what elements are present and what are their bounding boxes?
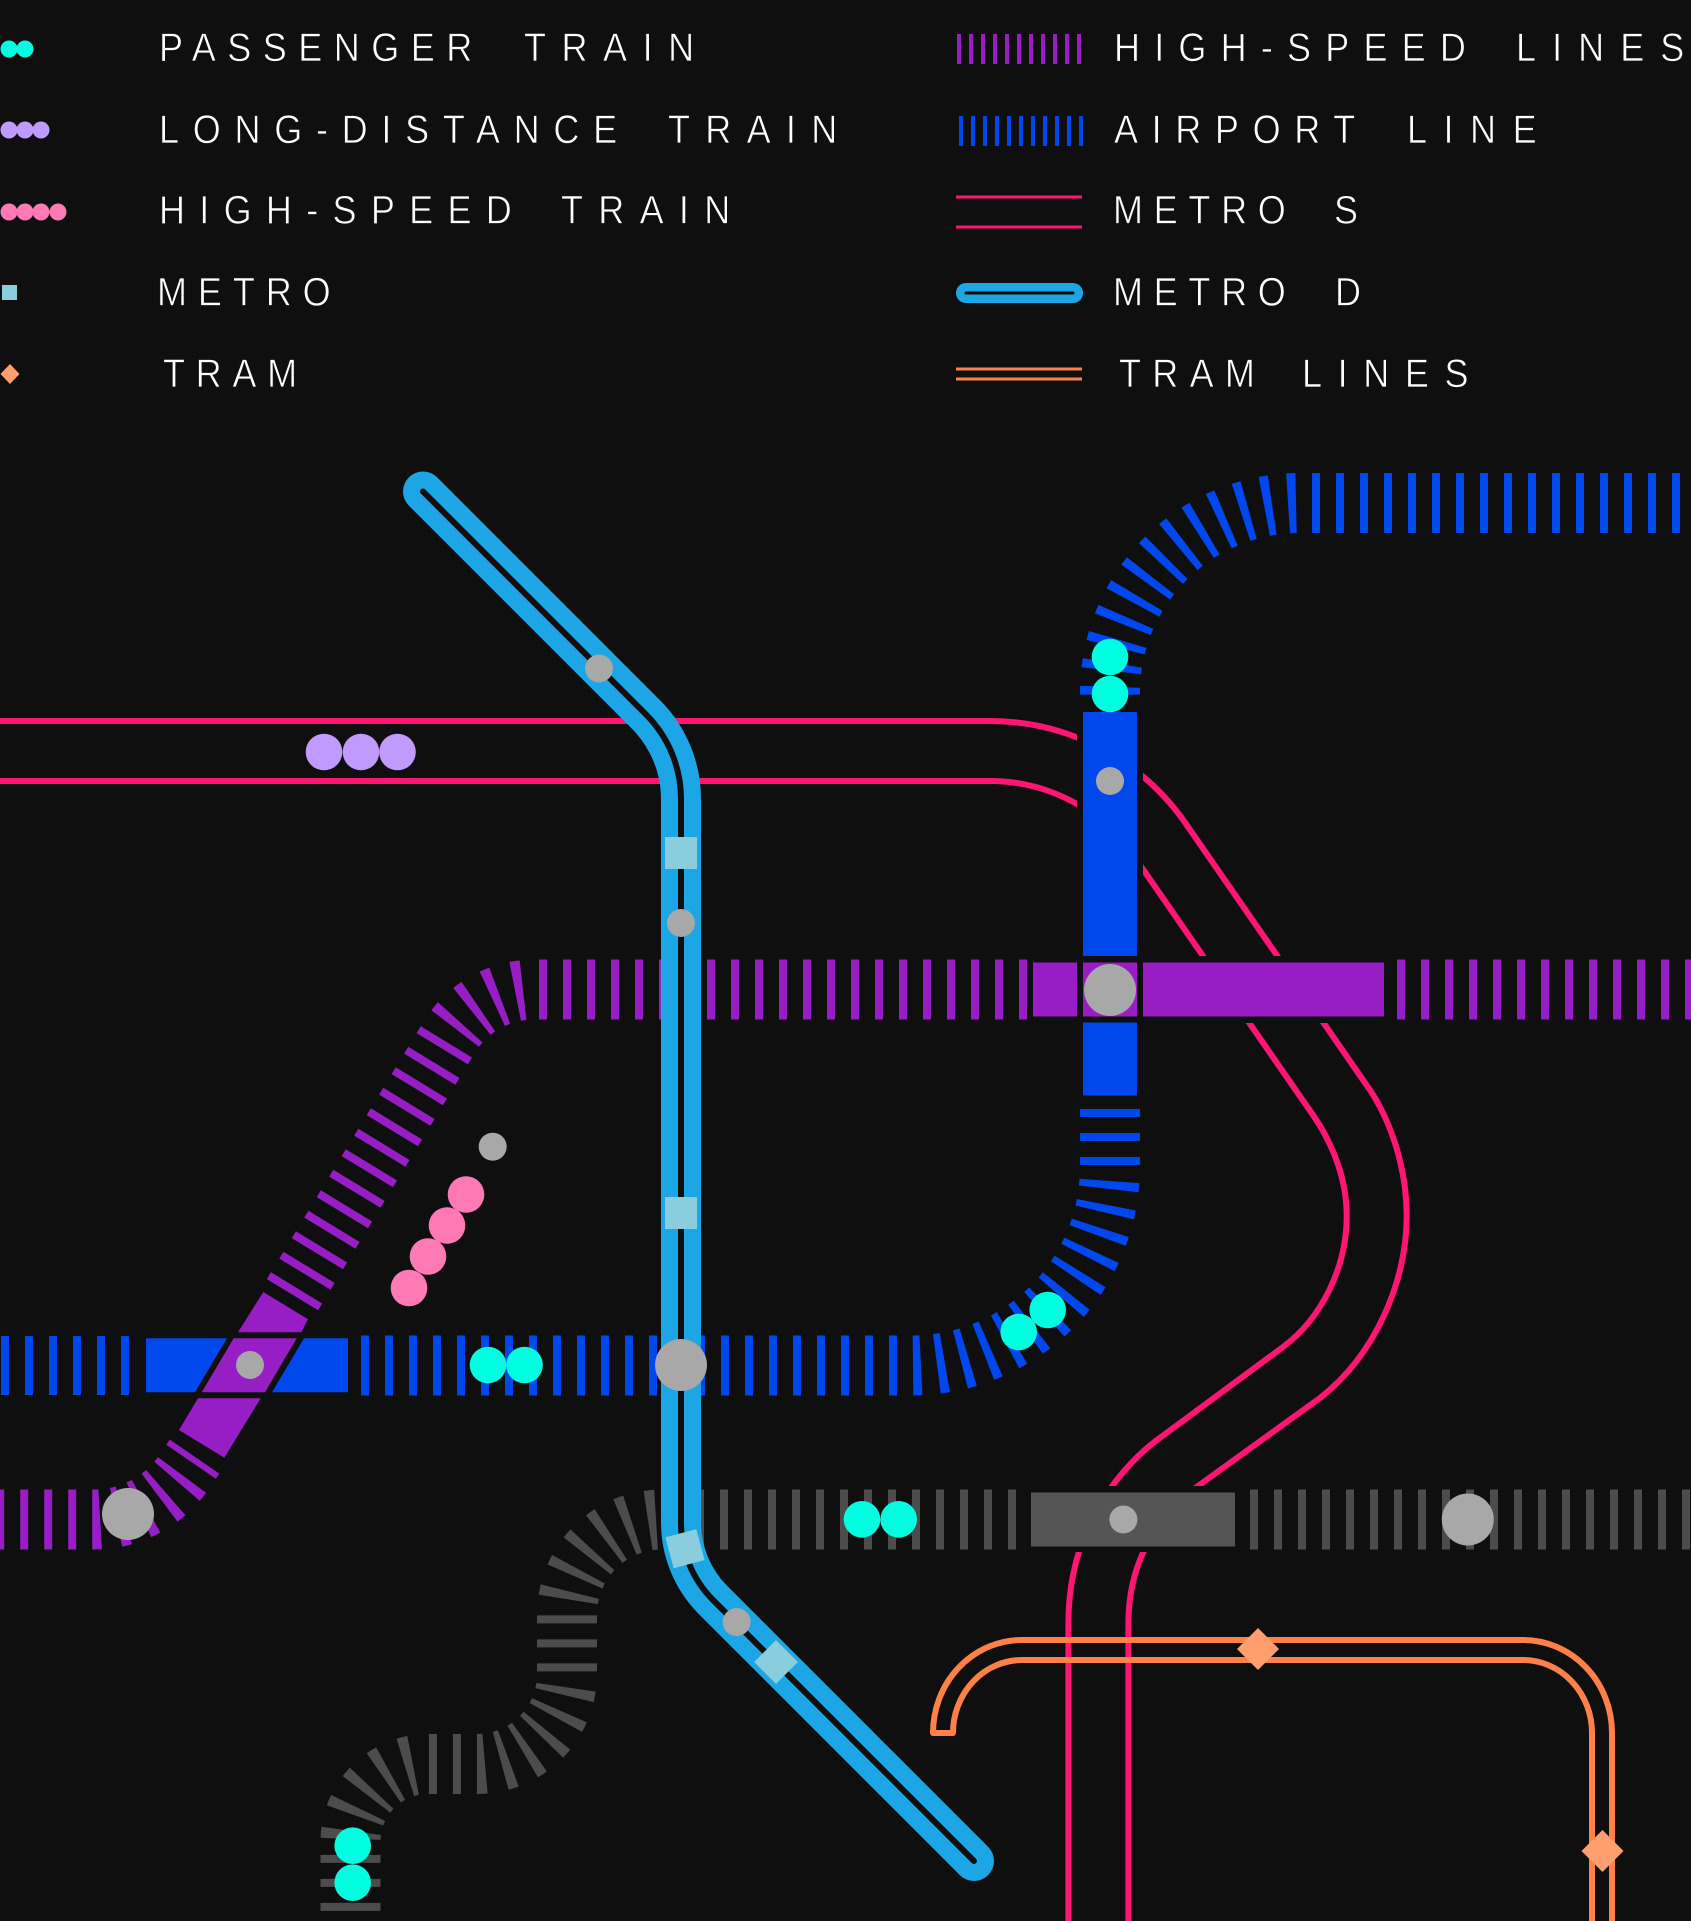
legend: high-speed lines: LINES (1516, 26, 1684, 70)
legend: metro: METRO (157, 271, 331, 315)
tram lines (933, 1640, 1612, 1921)
high-speed line: lower left (0, 1457, 195, 1520)
passenger trains (334, 639, 1128, 1901)
legend: tram: TRAM (163, 352, 297, 396)
legend: metro s: S (1334, 189, 1358, 233)
legend: long-distance train: LONG-DISTANCE (159, 108, 617, 152)
high-speed train (391, 1176, 484, 1306)
legend (0, 26, 1684, 396)
airport line: horizontal right and curve (361, 1105, 1110, 1366)
legend: tram lines (956, 352, 1468, 396)
legend: passenger train (0, 26, 694, 70)
metro D line (423, 492, 974, 1861)
legend: metro d: METRO (1113, 271, 1286, 315)
legend: metro s: METRO (1113, 189, 1286, 233)
legend: high-speed train (0, 189, 730, 233)
legend: metro d (956, 271, 1361, 315)
station block: blue and purple crossing right (1033, 712, 1384, 1096)
legend: passenger train: TRAIN (524, 26, 694, 70)
legend: high-speed train: HIGH-SPEED (159, 189, 512, 233)
legend: passenger train: PASSENGER (159, 26, 472, 70)
legend: high-speed train: TRAIN (561, 189, 730, 233)
station block: blue and purple crossing left (146, 1292, 348, 1458)
legend: tram lines: LINES (1302, 352, 1469, 396)
legend: high-speed lines: HIGH-SPEED (1114, 26, 1466, 70)
grey line: curve to the bottom (350, 1520, 1016, 1912)
airport line: top right (1110, 503, 1680, 695)
tram stops (1237, 1628, 1624, 1872)
grey stations (102, 654, 1494, 1636)
metro S lines (0, 721, 1407, 1921)
legend: long-distance train: TRAIN (668, 108, 837, 152)
station block: grey line (1031, 1492, 1235, 1546)
grey line: right (1250, 1490, 1691, 1550)
legend: high-speed lines (957, 26, 1684, 70)
legend: airport line: LINE (1407, 108, 1537, 152)
metro stops (665, 837, 798, 1684)
legend: tram lines: TRAM (1119, 352, 1255, 396)
legend: metro d: D (1335, 271, 1361, 315)
legend: metro (2, 271, 331, 315)
legend: long-distance train (0, 108, 837, 152)
legend: airport line: AIRPORT (1114, 108, 1355, 152)
legend: tram (0, 352, 297, 396)
long-distance train (306, 734, 416, 770)
high-speed line: curve and diagonal (290, 990, 1027, 1298)
legend: airport line (959, 108, 1537, 152)
airport line: horizontal left (1, 1336, 130, 1395)
high-speed line: right (1397, 960, 1691, 1020)
legend: metro s (956, 189, 1358, 233)
